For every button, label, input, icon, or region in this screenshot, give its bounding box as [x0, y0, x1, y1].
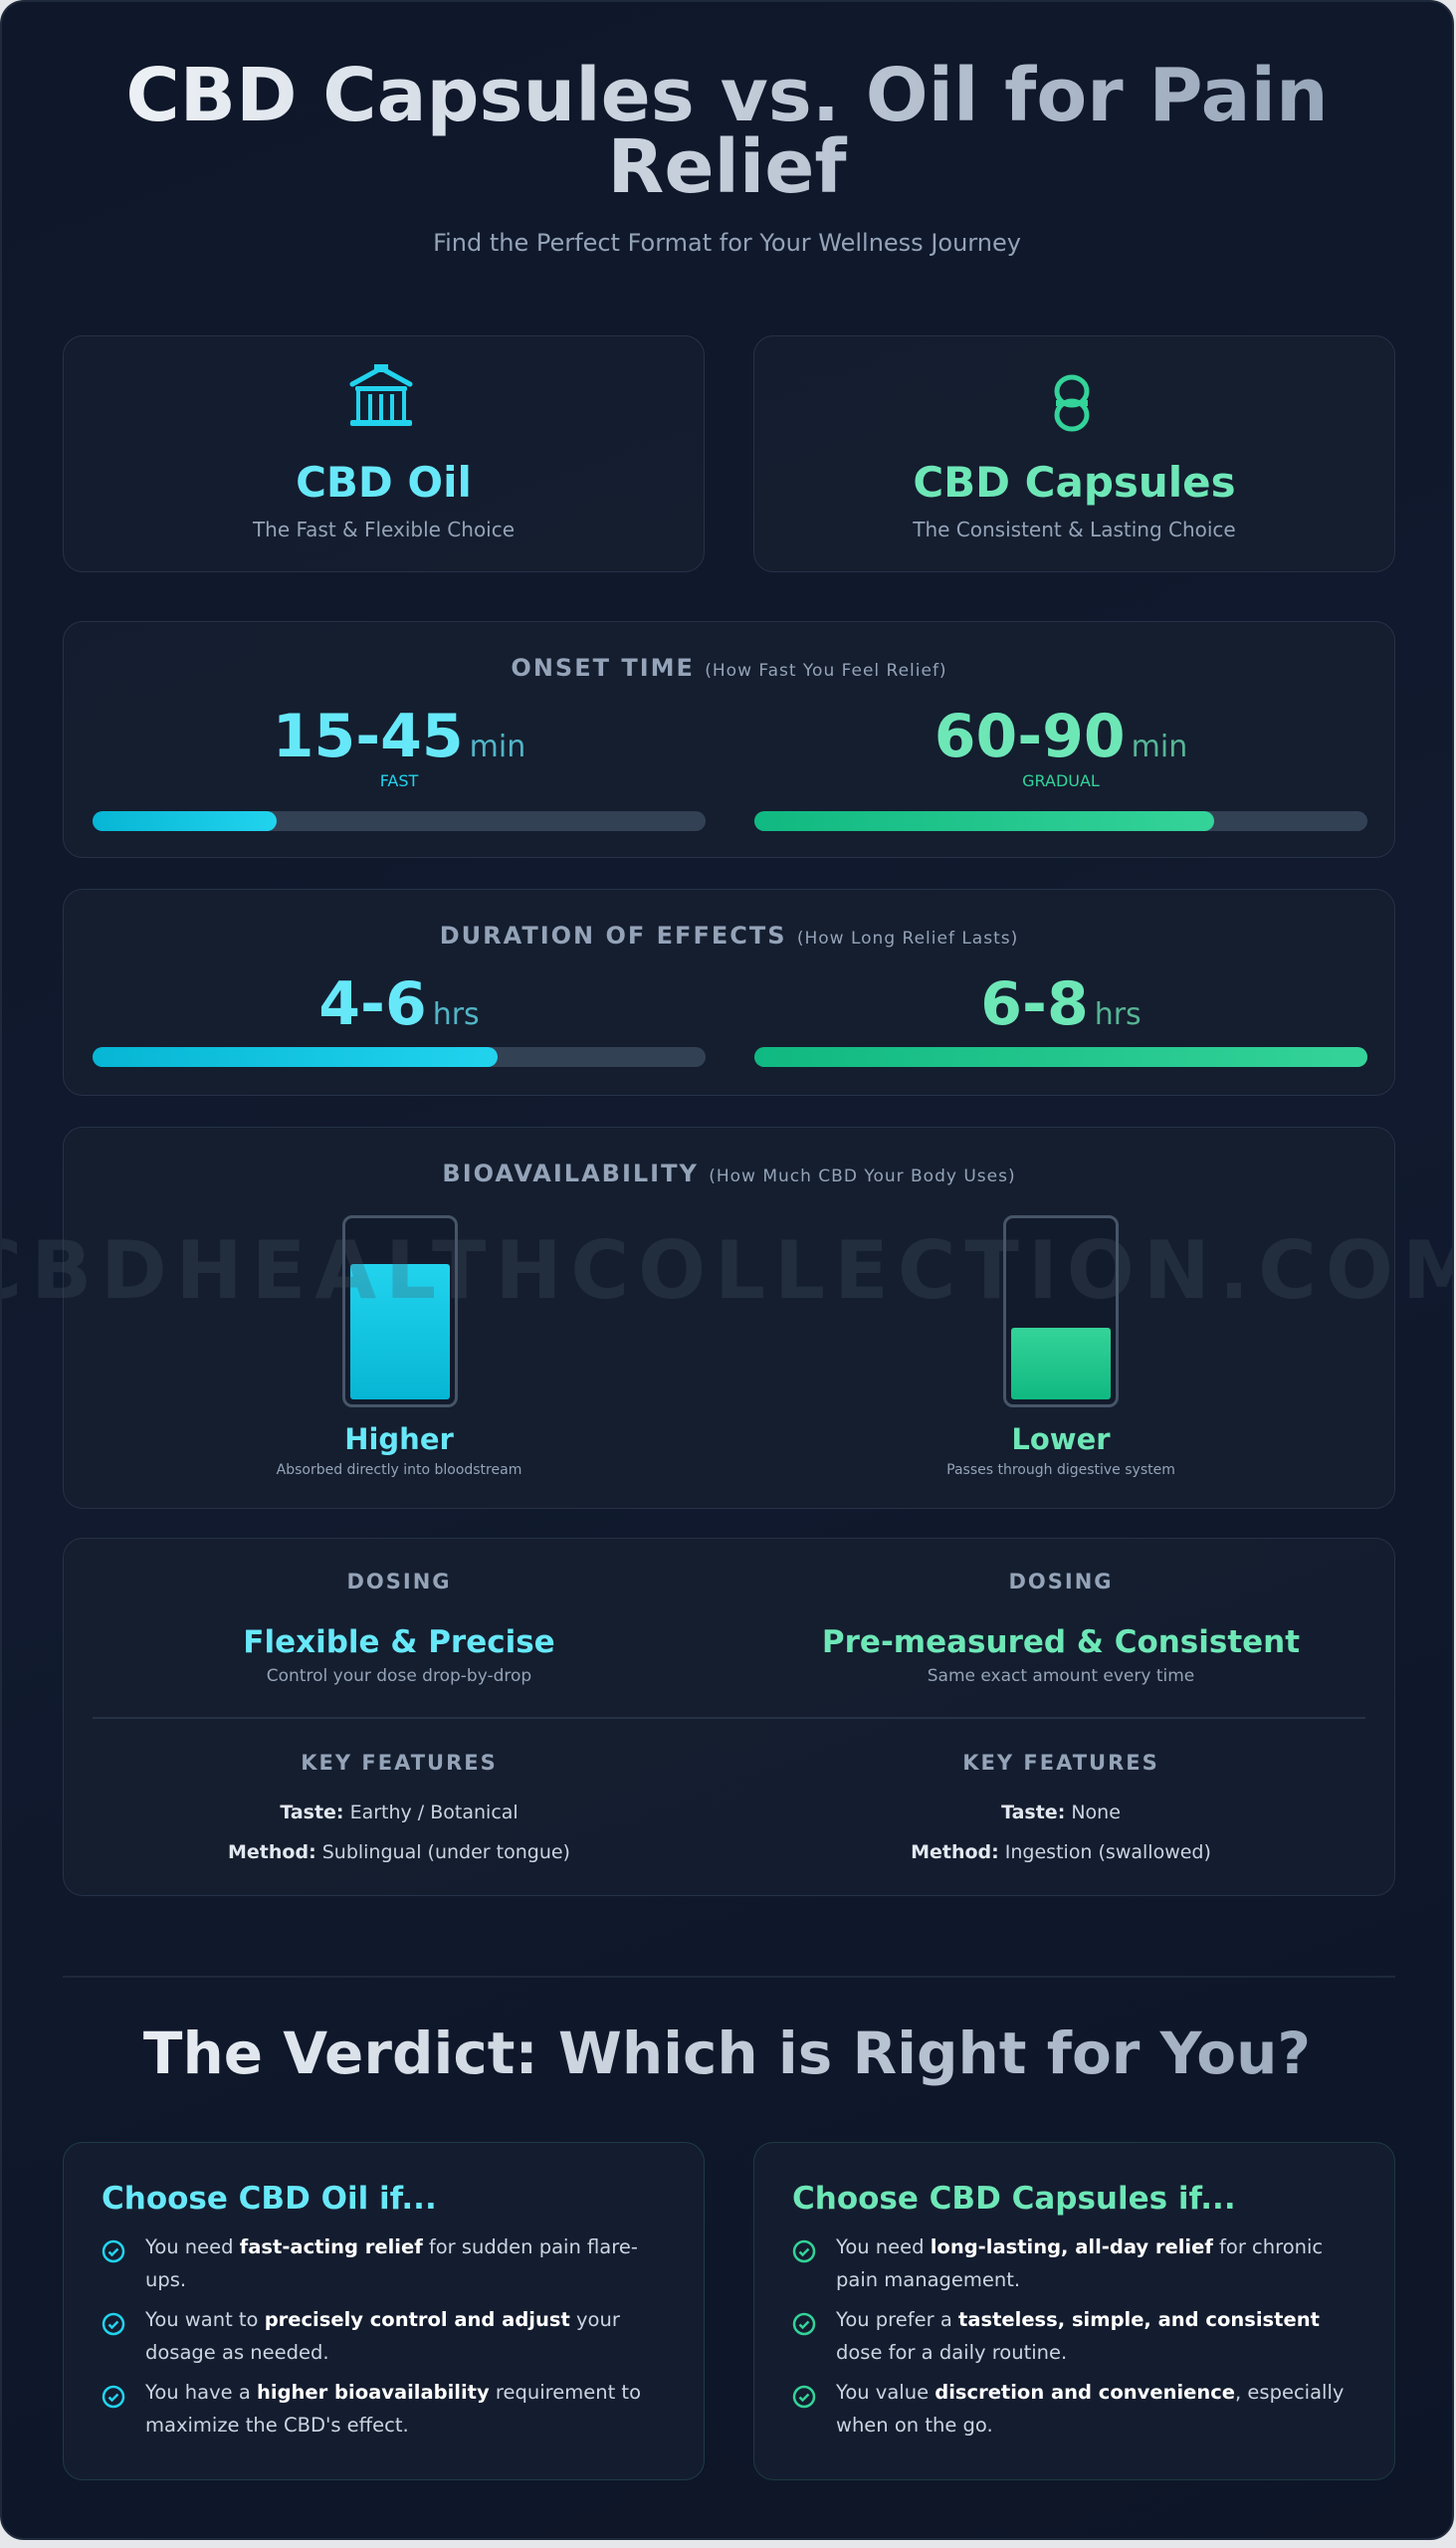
- panel: dosing & features: Flexible & Precise: [243, 1624, 555, 1660]
- panel: choose capsules: You prefer a tasteless, simple, and consistent dose for a daily routine.: [836, 2308, 1320, 2364]
- panel: onset time: [63, 621, 1395, 858]
- heading: CBD Oil: CBD Oil: [296, 458, 472, 507]
- panel: dosing & features: Control your dose drop-by-drop: [267, 1666, 531, 1686]
- verdict heading: The Verdict: Which is Right for You?: [143, 2019, 1311, 2087]
- panel: choose oil: [63, 2142, 705, 2480]
- panel: bioavailability: BIOAVAILABILITY (How Much CBD Your Body Uses): [442, 1160, 1016, 1187]
- panel: choose capsules: Choose CBD Capsules if...: [792, 2181, 1236, 2217]
- panel: dosing & features: KEY FEATURES: [301, 1751, 498, 1775]
- capsule dosing: [822, 1570, 1300, 1863]
- panel: bioavailability: Passes through digestive system: [946, 1462, 1175, 1478]
- panel: choose oil: Choose CBD Oil if...: [102, 2181, 437, 2217]
- panel: dosing & features: Taste: None: [1001, 1802, 1121, 1823]
- oil onset: 15-45min: [273, 702, 525, 771]
- panel: dosing & features: DOSING: [1008, 1570, 1114, 1593]
- capsule duration: 6-8hrs: [980, 969, 1142, 1039]
- panel: onset time: ONSET TIME (How Fast You Feel Relief): [511, 654, 947, 682]
- oil dosing: [228, 1570, 570, 1863]
- panel: CBD Capsules header: [753, 335, 1395, 572]
- oil duration: 4-6hrs: [318, 969, 480, 1039]
- panel: CBD Capsules header: The Consistent & Lasting Choice: [913, 518, 1236, 541]
- panel: CBD Oil header: The Fast & Flexible Choice: [253, 518, 515, 541]
- panel: choose capsules: You need long-lasting, all-day relief for chronic pain management.: [836, 2235, 1323, 2291]
- panel: choose capsules: [753, 2142, 1395, 2480]
- panel: duration: DURATION OF EFFECTS (How Long Relief Lasts): [440, 922, 1018, 950]
- panel: choose oil: You need fast-acting relief for sudden pain flare-ups.: [145, 2235, 638, 2291]
- panel: choose capsules: You value discretion and convenience, especially when on the go.: [836, 2381, 1344, 2437]
- panel: dosing & features: DOSING: [346, 1570, 452, 1593]
- panel: duration: [63, 889, 1395, 1096]
- panel: dosing & features: [63, 1538, 1395, 1896]
- panel: onset time: FAST: [380, 771, 418, 790]
- panel: dosing & features: Method: Ingestion (swallowed): [911, 1841, 1211, 1863]
- icon: capsule: [1055, 374, 1089, 432]
- panel: dosing & features: KEY FEATURES: [962, 1751, 1159, 1775]
- panel: bioavailability: Higher: [344, 1422, 454, 1456]
- vial: oil: [342, 1215, 458, 1407]
- panel: dosing & features: Pre-measured & Consistent: [822, 1624, 1300, 1660]
- panel: bioavailability: [63, 1127, 1395, 1509]
- panel: choose oil: You want to precisely control and adjust your dosage as needed.: [145, 2308, 620, 2364]
- panel: onset time: GRADUAL: [1022, 771, 1100, 790]
- panel: choose oil: You have a higher bioavailability requirement to maximize the CBD's effect.: [145, 2381, 641, 2437]
- panel: dosing & features: Taste: Earthy / Botanical: [280, 1802, 519, 1823]
- title: CBD Capsules vs. Oil for Pain Relief: [125, 53, 1329, 210]
- panel: CBD Oil header: [63, 335, 705, 572]
- panel: bioavailability: Absorbed directly into bloodstream: [277, 1462, 521, 1478]
- icon: oil bottle: [350, 364, 412, 426]
- panel: dosing & features: Same exact amount every time: [928, 1666, 1194, 1686]
- vial: capsules: [1003, 1215, 1119, 1407]
- capsule onset: 60-90min: [935, 702, 1187, 771]
- heading: CBD Capsules: CBD Capsules: [913, 458, 1236, 507]
- panel: bioavailability: Lower: [1011, 1422, 1111, 1456]
- panel: dosing & features: Method: Sublingual (under tongue): [228, 1841, 570, 1863]
- subtitle: Find the Perfect Format for Your Wellness Journey: [433, 229, 1021, 257]
